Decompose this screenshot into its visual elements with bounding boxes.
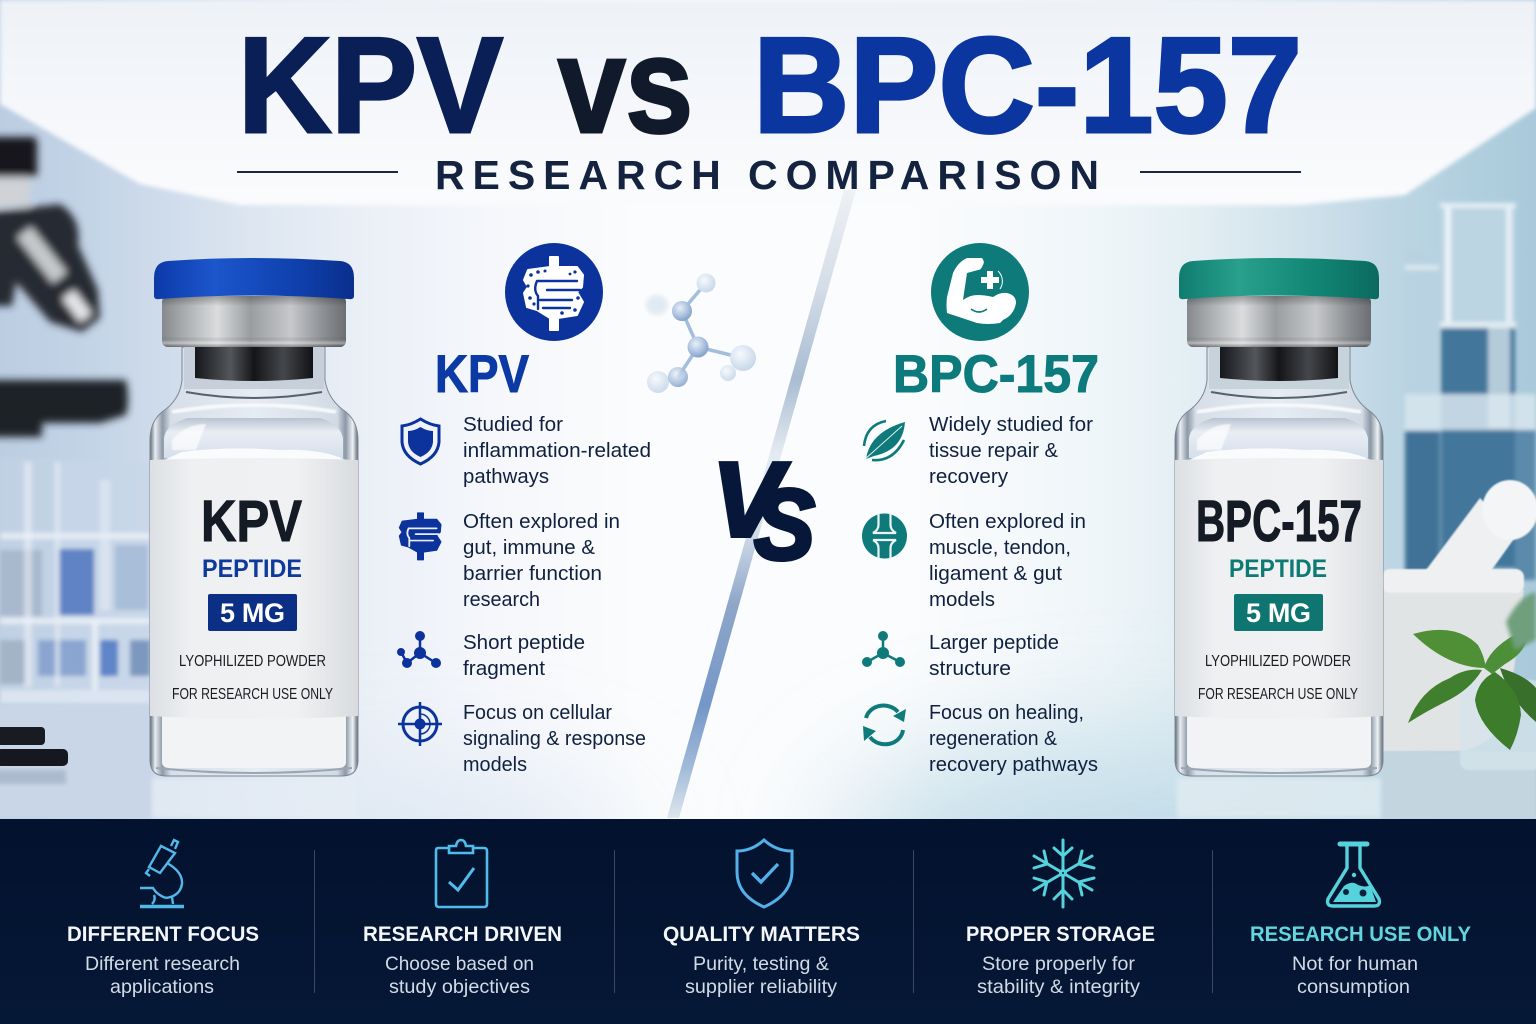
label PEPTIDE: PEPTIDE [1229, 555, 1327, 583]
text: muscle, tendon, [929, 536, 1071, 559]
text [929, 631, 1059, 680]
description [385, 953, 534, 998]
description [685, 953, 837, 998]
lab table right [1382, 680, 1536, 819]
text: regeneration & [929, 727, 1057, 750]
icon: snowflake [1034, 840, 1094, 907]
description: applications [110, 976, 214, 998]
description: stability & integrity [977, 976, 1140, 998]
title: DIFFERENT FOCUS [67, 923, 259, 946]
feature: research driven [363, 840, 562, 998]
text [463, 631, 585, 680]
vial reflection [152, 778, 356, 818]
5 MG badge [1234, 594, 1323, 631]
label research use: FOR RESEARCH USE ONLY [1198, 686, 1358, 703]
base rim [1181, 768, 1377, 773]
heading: BPC-157: BPC-157 [893, 345, 1099, 404]
text: Widely studied for [929, 413, 1093, 436]
text: pathways [463, 465, 549, 488]
glass shoulder highlights [1197, 392, 1361, 412]
glass window [164, 418, 343, 458]
title: RESEARCH USE ONLY [1250, 923, 1471, 946]
text: gut, immune & [463, 536, 595, 559]
neck [1220, 347, 1338, 381]
powder top [1189, 448, 1371, 460]
text [463, 413, 651, 488]
feature: proper storage [966, 840, 1155, 998]
text: structure [929, 657, 1011, 680]
icon: tissue leaf [864, 421, 905, 460]
BPC item 3 [862, 631, 1059, 680]
teal cap [1179, 258, 1379, 299]
molecule decoration [646, 274, 756, 393]
text [463, 510, 620, 611]
text: recovery [929, 465, 1009, 488]
feature: different focus [67, 840, 259, 998]
text [929, 413, 1093, 488]
KPV item 4 [398, 701, 646, 776]
icon: target [398, 702, 442, 746]
text [929, 701, 1098, 776]
glassware, blurred right background [1405, 203, 1536, 601]
5 MG badge: 5 MG [220, 598, 285, 628]
title [238, 9, 1302, 161]
icon: microscope [140, 840, 184, 906]
description: supplier reliability [685, 976, 837, 998]
powder bottom [1187, 716, 1371, 768]
label KPV: KPV [201, 489, 302, 554]
icon: intestine [400, 513, 441, 560]
text: Studied for [463, 413, 563, 436]
lab table left [0, 704, 152, 819]
subtitle with rules: RESEARCH COMPARISON [435, 152, 1099, 198]
description [1292, 953, 1418, 998]
icon: flask [1328, 844, 1379, 906]
icon: molecule [862, 631, 905, 667]
feature: research use only [1250, 844, 1471, 998]
text: tissue repair & [929, 439, 1058, 462]
icon: molecule [398, 632, 440, 668]
text: barrier function [463, 562, 602, 585]
icon: cycle arrows [863, 706, 906, 744]
VS mark: V [712, 441, 790, 559]
neck glass [184, 347, 324, 389]
glass window [1189, 418, 1368, 458]
mortar and pestle [1382, 480, 1536, 751]
VS mark: S [754, 469, 815, 581]
label LYOPHILIZED POWDER: LYOPHILIZED POWDER [179, 653, 326, 670]
KPV item 1 [402, 413, 651, 488]
title: PROPER STORAGE [966, 923, 1155, 946]
icon: joint [862, 513, 907, 559]
text: ligament & gut [929, 562, 1062, 585]
vial reflection [1177, 778, 1381, 818]
text: models [929, 588, 995, 611]
label research use: FOR RESEARCH USE ONLY [172, 686, 333, 703]
5 MG badge [208, 594, 297, 631]
text: Focus on cellular [463, 701, 612, 724]
header band [0, 0, 1536, 205]
silver crimp [1187, 296, 1371, 347]
diagonal divider [667, 190, 856, 818]
label [1175, 458, 1383, 719]
label LYOPHILIZED POWDER: LYOPHILIZED POWDER [1205, 653, 1351, 670]
glass shoulder highlights [172, 392, 336, 412]
description: consumption [1297, 976, 1410, 998]
leaves [1408, 592, 1536, 750]
bottom band [0, 819, 1536, 1024]
icon: shield [402, 419, 439, 464]
text: Larger peptide [929, 631, 1059, 654]
icon: BPC-157 muscle badge [931, 243, 1029, 341]
text [929, 510, 1086, 611]
BPC item 1 [864, 413, 1093, 488]
glass streak [172, 424, 206, 450]
text: fragment [463, 657, 545, 680]
description: study objectives [389, 976, 530, 998]
powder bottom [162, 716, 346, 768]
vial: KPV [150, 258, 358, 818]
5 MG badge: 5 MG [1246, 598, 1311, 628]
text [463, 701, 646, 776]
KPV item 3 [398, 631, 585, 680]
glass body [1175, 347, 1383, 776]
title: BPC-157: BPC-157 [753, 9, 1302, 161]
BPC item 4 [863, 701, 1098, 776]
label [150, 458, 358, 719]
text: models [463, 753, 527, 776]
label BPC-157: BPC-157 [1196, 489, 1362, 554]
microscope, blurred left background [0, 137, 128, 437]
text: research [463, 588, 540, 611]
icon: clipboard [436, 840, 487, 907]
icon: KPV intestine badge [505, 243, 603, 341]
VS mark [712, 441, 815, 581]
text: Short peptide [463, 631, 585, 654]
text: recovery pathways [929, 753, 1098, 776]
description [977, 953, 1140, 998]
text: inflammation-related [463, 439, 651, 462]
description: Different research [85, 953, 240, 975]
label PEPTIDE: PEPTIDE [202, 555, 302, 583]
powder top [164, 448, 346, 460]
neck [195, 347, 313, 381]
silver crimp [162, 296, 346, 347]
feature: quality matters [663, 840, 860, 998]
heading: KPV: KPV [435, 345, 529, 404]
title: vs: vs [558, 9, 693, 161]
description: Not for human [1292, 953, 1418, 975]
description: Purity, testing & [693, 953, 829, 975]
KPV item 2 [400, 510, 620, 611]
title: RESEARCH DRIVEN [363, 923, 562, 946]
description [85, 953, 240, 998]
base rim [156, 768, 352, 773]
neck glass [1209, 347, 1349, 389]
BPC item 2 [862, 510, 1086, 611]
text: Often explored in [929, 510, 1086, 533]
glass body [150, 347, 358, 776]
title: QUALITY MATTERS [663, 923, 860, 946]
blue cap [154, 258, 354, 299]
description: Choose based on [385, 953, 534, 975]
text: signaling & response [463, 727, 646, 750]
text: Often explored in [463, 510, 620, 533]
description: Store properly for [982, 953, 1136, 975]
glass streak [1197, 424, 1231, 450]
text: Focus on healing, [929, 701, 1084, 724]
title: KPV: KPV [238, 9, 503, 161]
test tube rack, blurred left background [0, 458, 150, 704]
vial: BPC-157 [1175, 258, 1383, 818]
icon: shield check [737, 840, 792, 907]
